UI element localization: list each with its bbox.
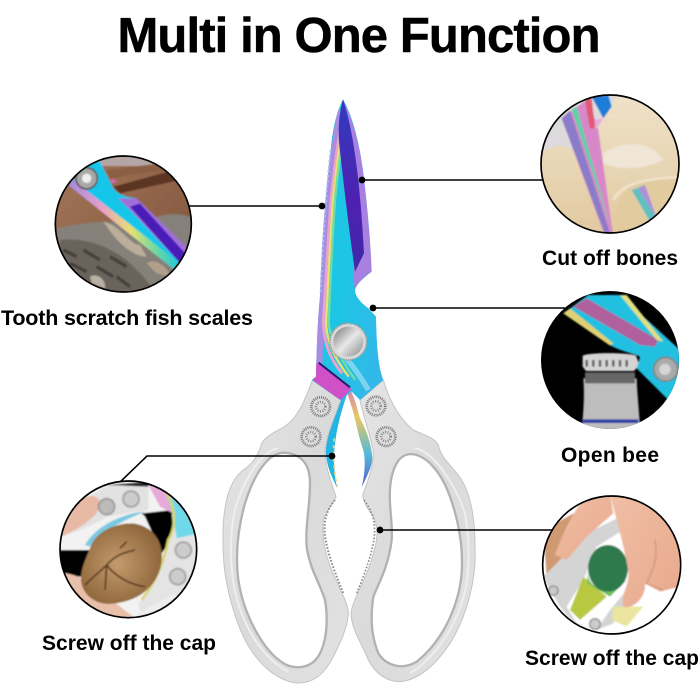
title: Multi in One Function xyxy=(118,9,600,63)
scissors xyxy=(223,97,475,683)
label: Open bee xyxy=(561,444,659,467)
callout: fish scales xyxy=(1,153,325,330)
callout: lime bottle cap xyxy=(377,493,699,670)
leader line xyxy=(165,205,322,207)
leader line xyxy=(362,179,543,181)
leader line xyxy=(373,307,565,309)
pivot rivet xyxy=(330,323,367,360)
circle photo: bottle xyxy=(541,291,680,432)
circle photo: bottle cap xyxy=(540,493,683,637)
circle photo: walnut xyxy=(58,480,198,620)
label: Screw off the cap xyxy=(525,647,699,670)
left handle xyxy=(223,380,348,683)
leader line xyxy=(118,456,332,484)
label: Screw off the cap xyxy=(42,632,216,655)
circle photo: bones xyxy=(540,93,683,237)
circle photo: fish xyxy=(53,153,193,297)
rainbow blade xyxy=(312,100,384,400)
right handle xyxy=(343,380,475,682)
leader line xyxy=(380,529,552,531)
label: Tooth scratch fish scales xyxy=(1,306,253,330)
label: Cut off bones xyxy=(542,247,678,270)
callout: walnut xyxy=(42,453,335,655)
callout: bones xyxy=(359,93,683,270)
callout: bottle opener xyxy=(370,291,680,467)
